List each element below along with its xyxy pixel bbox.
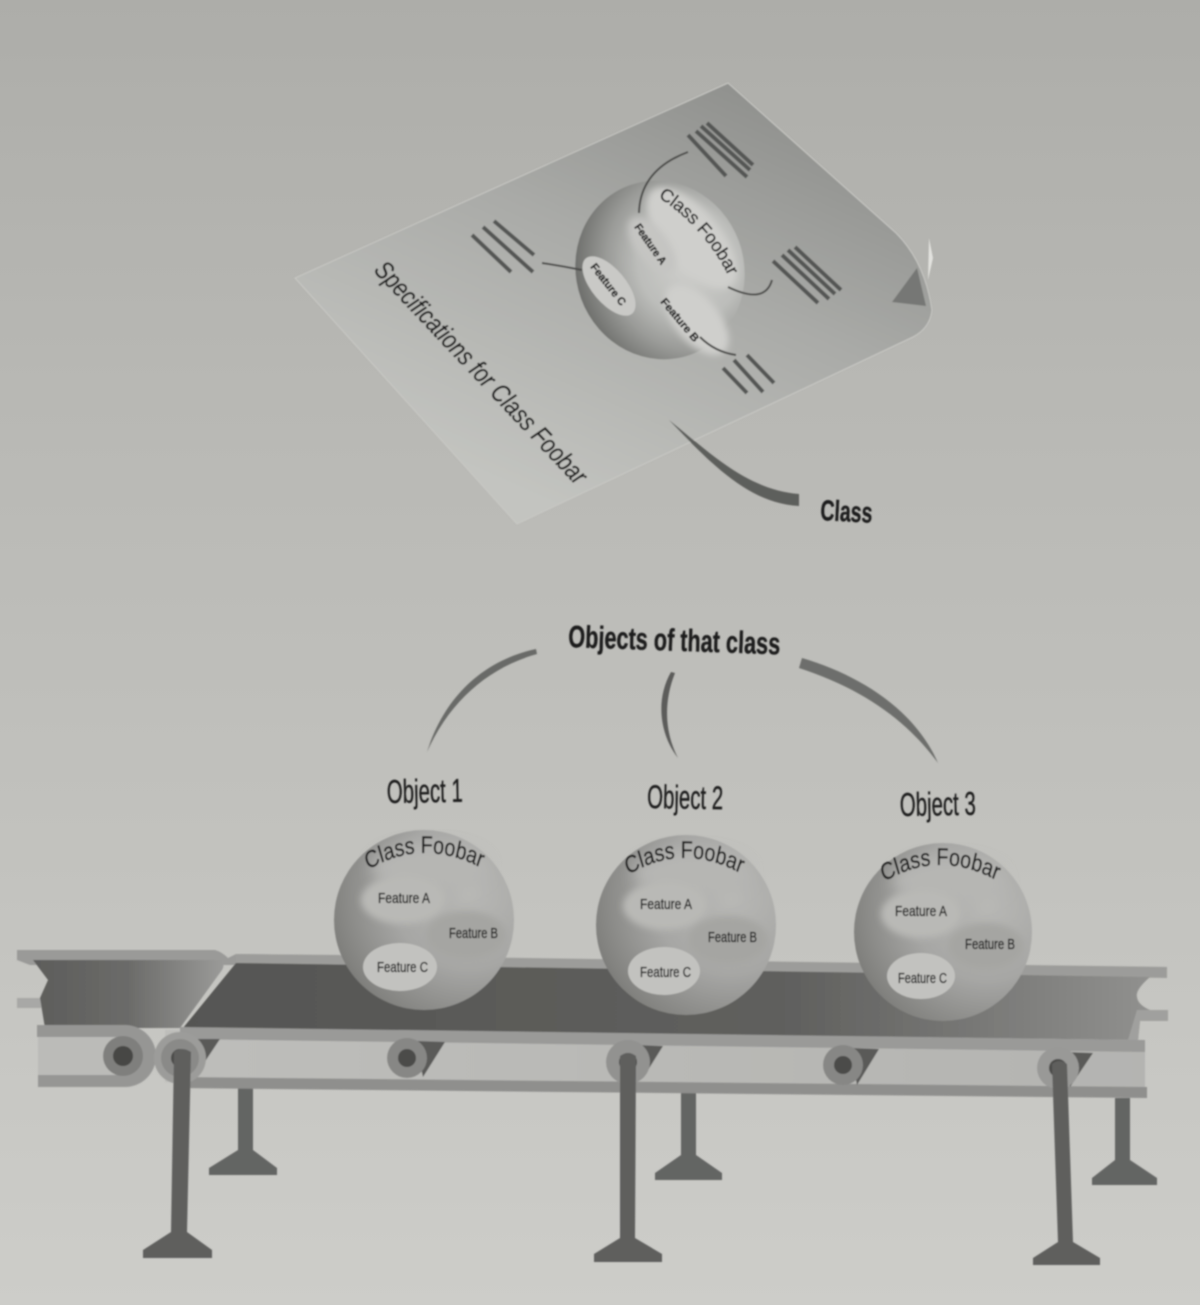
ball 2 feature A oval (623, 882, 707, 930)
ball 1 top highlight (372, 844, 488, 892)
ball 1 feature A label: Feature A (378, 890, 430, 907)
belt right tab (1128, 1010, 1168, 1040)
feature C oval (573, 247, 645, 325)
page curl shadow (892, 268, 926, 306)
main dark belt (183, 963, 1150, 1040)
roller 4 (606, 1040, 663, 1084)
ball 2 feature C oval (628, 947, 700, 995)
frame top rail main (180, 1027, 1145, 1052)
feature B patch (653, 274, 741, 366)
frame top rail left (37, 1025, 156, 1087)
roller 5 (823, 1045, 879, 1085)
front legs (143, 1049, 1100, 1265)
sheet heading: Specifications for Class Foobar (369, 255, 595, 491)
ball 2 class name: Class Foobar (624, 840, 746, 873)
ball 2 feature B label: Feature B (708, 929, 757, 946)
ball 1 class name: Class Foobar (364, 835, 486, 868)
left belt tab (17, 998, 44, 1008)
panel: class specification sheet (295, 82, 934, 524)
frame bottom rail main (180, 1077, 1147, 1098)
object 2 (595, 778, 776, 1016)
ball 2 feature A label: Feature A (640, 896, 692, 913)
feature A oval (619, 209, 685, 281)
paper glare (928, 238, 933, 280)
rear legs (209, 1087, 1157, 1185)
text lines group 3 (773, 247, 841, 303)
sheet feature A label: Feature A (632, 222, 668, 267)
label: Class: Class (820, 495, 873, 530)
class name highlight (631, 173, 753, 303)
ball 1 feature A oval (361, 876, 445, 924)
ball 3 feature A label: Feature A (895, 903, 947, 920)
label: Object 3: Object 3 (899, 785, 976, 823)
frame background left (38, 1030, 135, 1082)
arrow: right object pointer (799, 658, 938, 763)
text lines group 2 (688, 123, 753, 177)
sheet ball class name: Class Foobar (660, 188, 738, 274)
label: Object 1: Object 1 (386, 772, 463, 810)
ball 3 class name: Class Foobar (880, 847, 1002, 880)
ball 2 feature B patch (688, 916, 768, 964)
text lines group 1 (472, 221, 534, 272)
ball 3 feature B label: Feature B (965, 936, 1015, 953)
specification ball (550, 157, 770, 383)
ball 3 feature A oval (881, 890, 961, 938)
ball 2 top highlight (634, 850, 750, 898)
text lines group 4 (723, 355, 774, 393)
roller 6 (1037, 1047, 1093, 1089)
ball 2 feature C label: Feature C (640, 964, 691, 981)
ball 3 feature B patch (948, 923, 1024, 969)
arrow: class callout (669, 420, 799, 506)
arrow: middle object pointer (661, 672, 678, 758)
left belt panel (33, 960, 224, 1028)
ball 1 feature B patch (426, 911, 506, 959)
ball 3 (854, 843, 1032, 1021)
roller 3 (387, 1038, 445, 1078)
ball 1 feature C oval (363, 943, 437, 991)
sheet feature C label: Feature C (588, 261, 628, 308)
centre and right belt top strip (236, 954, 1167, 978)
sheet feature B label: Feature B (658, 296, 701, 345)
ball 2 (596, 835, 776, 1015)
ball 1 feature B label: Feature B (449, 925, 498, 942)
object 1 (333, 772, 514, 1011)
ball 3 feature C oval (887, 953, 955, 999)
ball 3 feature C label: Feature C (898, 970, 947, 987)
connector lines (542, 152, 772, 355)
label: Object 2: Object 2 (647, 778, 724, 816)
arrow: left object pointer (427, 649, 537, 752)
object 3 (853, 785, 1032, 1022)
left belt top strip (17, 950, 340, 965)
heading: Objects of that class: Objects of that class (568, 619, 781, 661)
conveyor belt (17, 950, 1168, 1265)
roller 1 (103, 1036, 143, 1076)
frame background main (165, 1030, 1145, 1094)
ball 1 (334, 830, 514, 1010)
roller 2 (154, 1032, 220, 1084)
ball 1 feature C label: Feature C (377, 959, 428, 976)
ball 3 top highlight (893, 857, 1005, 905)
sheet of paper (295, 83, 932, 524)
